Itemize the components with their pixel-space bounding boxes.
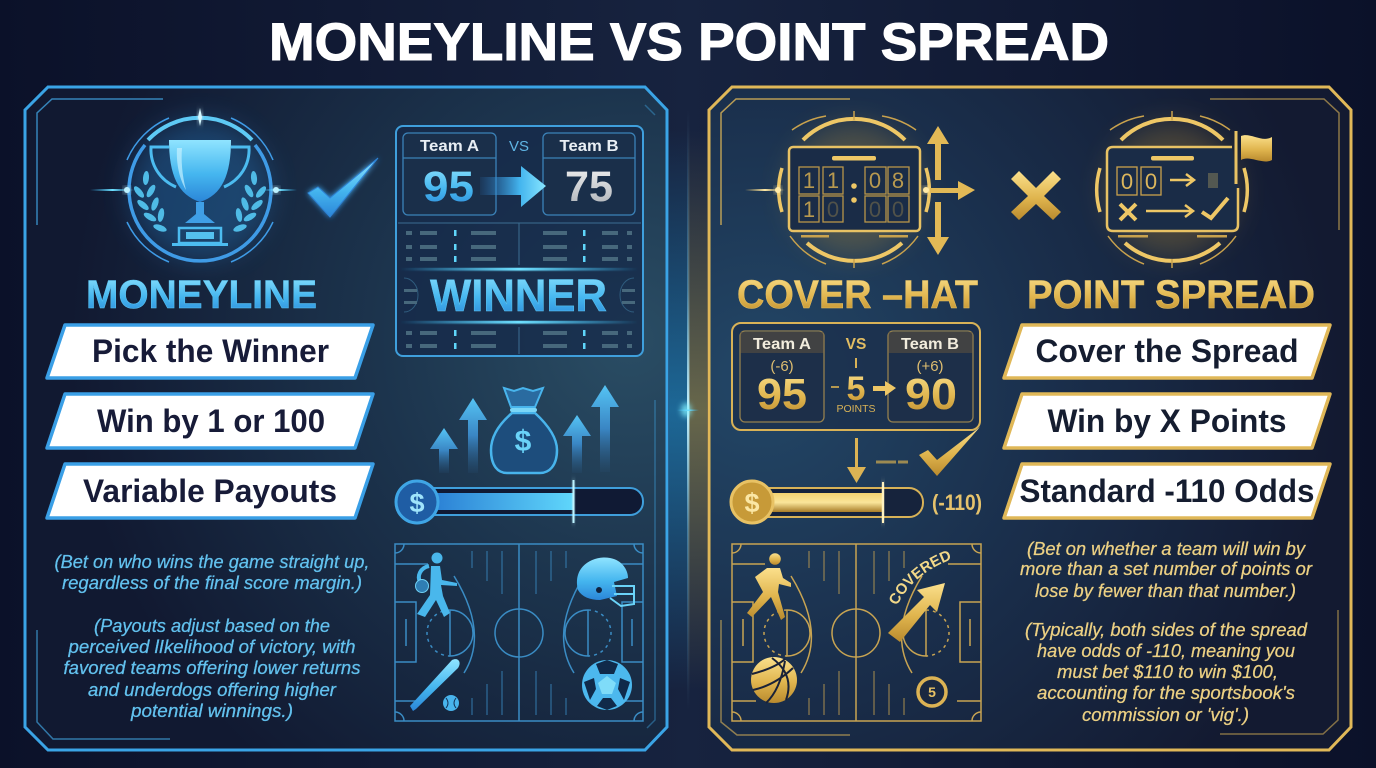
team A score: Team A bbox=[420, 138, 479, 155]
note: payouts: and underdogs offering higher bbox=[88, 680, 337, 700]
margin: 5 points: POINTS bbox=[836, 403, 876, 415]
pill: cover the spread: Cover the Spread bbox=[1036, 333, 1298, 369]
arrow: down to payout bbox=[847, 438, 866, 483]
progress bar: payout: $ bbox=[409, 488, 425, 518]
note: vig: (Typically, both sides of the spread bbox=[1025, 620, 1308, 640]
pill: win by 1 or 100: Win by 1 or 100 bbox=[97, 403, 325, 439]
icon: trophy emblem bbox=[90, 108, 297, 262]
pill: standard odds: Standard -110 Odds bbox=[1020, 473, 1314, 509]
progress bar: payout bbox=[396, 480, 643, 523]
note: spread bet: lose by fewer than that number.) bbox=[1035, 581, 1296, 601]
note: straight up bet: (Bet on who wins the game straight up, bbox=[54, 552, 370, 572]
team B score: Team B bbox=[560, 138, 618, 155]
icon: gold cross bbox=[1011, 171, 1061, 220]
note: vig: accounting for the sportsbook's bbox=[1037, 683, 1295, 703]
margin: 5 points: VS bbox=[846, 336, 866, 353]
team B spread score: 90 bbox=[905, 370, 957, 419]
heading: cover what: COVER –HAT bbox=[737, 273, 978, 317]
progress bar: spread payout: $ bbox=[744, 488, 760, 518]
icon: spread board emblem bbox=[1097, 111, 1272, 268]
note: payouts bbox=[64, 616, 360, 721]
note: straight up bet: regardless of the final score margin.) bbox=[62, 573, 362, 593]
pill: pick the winner bbox=[47, 325, 373, 378]
team B score bbox=[543, 133, 635, 215]
digits and outcome arrows bbox=[1117, 167, 1228, 220]
note: vig bbox=[1025, 620, 1308, 725]
note: payouts: perceived lIkelihood of victory, with bbox=[67, 637, 356, 657]
icon: scoreboard emblem: 1 bbox=[827, 168, 839, 193]
icon: scoreboard emblem: 0 bbox=[892, 197, 904, 222]
note: payouts: potential winnings.) bbox=[130, 701, 293, 721]
digits and outcome arrows: 0 bbox=[1121, 169, 1133, 194]
court with sports icons bbox=[395, 544, 643, 721]
icon: five coin bbox=[918, 678, 946, 706]
margin: 5 points bbox=[831, 336, 896, 415]
team A score bbox=[403, 133, 496, 215]
money bag: $ bbox=[515, 425, 532, 458]
icon: scoreboard emblem bbox=[745, 111, 929, 268]
money bag bbox=[491, 388, 557, 473]
icon: gold checkmark bbox=[919, 427, 980, 476]
team B spread score: Team B bbox=[901, 336, 959, 353]
icon: money bag with rising arrows bbox=[430, 385, 619, 473]
icon: football helmet bbox=[577, 557, 634, 606]
note: spread bet bbox=[1020, 539, 1313, 601]
dashed connector bbox=[876, 460, 908, 464]
note: spread bet: (Bet on whether a team will win by bbox=[1027, 539, 1306, 559]
team A spread score: 95 bbox=[757, 370, 807, 419]
team B spread score: (+6) bbox=[916, 358, 944, 375]
panel: moneyline bbox=[25, 87, 667, 750]
court lines bbox=[732, 544, 981, 721]
title: MONEYLINE VS POINT SPREAD bbox=[269, 13, 1109, 72]
pill: cover the spread bbox=[1004, 325, 1330, 378]
note: vig: commission or 'vig'.) bbox=[1082, 705, 1249, 725]
team A score: 95 bbox=[423, 163, 474, 211]
note: payouts: favored teams offering lower returns bbox=[64, 658, 360, 678]
pill: win by 1 or 100 bbox=[47, 394, 373, 448]
court with covered arrow bbox=[731, 543, 982, 722]
note: payouts: (Payouts adjust based on the bbox=[94, 616, 330, 636]
flip digits bbox=[799, 167, 909, 222]
team A spread score: (-6) bbox=[770, 358, 794, 375]
pill: variable payouts bbox=[47, 464, 373, 518]
icon: scoreboard emblem: 1 bbox=[803, 168, 815, 193]
panel frame: point spread bbox=[709, 87, 1351, 750]
label: covered: COVERED bbox=[890, 551, 950, 604]
icon: gold runner bbox=[747, 553, 791, 620]
note: vig: must bet $110 to win $100, bbox=[1057, 662, 1278, 682]
pill: pick the winner: Pick the Winner bbox=[92, 333, 329, 369]
scoreboard: winner bbox=[396, 126, 643, 356]
icon: scoreboard emblem: 1 bbox=[803, 197, 815, 222]
icon: spread direction arrows bbox=[927, 126, 975, 255]
note: straight up bet bbox=[54, 552, 370, 593]
heading: moneyline: MONEYLINE bbox=[86, 273, 317, 317]
arrow: covered bbox=[888, 583, 945, 642]
team A spread score bbox=[740, 331, 824, 422]
progress bar: spread payout bbox=[731, 481, 923, 523]
margin: 5 points: 5 bbox=[847, 370, 865, 408]
icon: blue checkmark bbox=[308, 158, 378, 217]
icon: soccer ball bbox=[582, 660, 632, 710]
digits and outcome arrows: 0 bbox=[1145, 169, 1157, 194]
winner banner text: WINNER bbox=[430, 270, 607, 321]
center divider glow bbox=[669, 110, 707, 710]
scoreboard: spread bbox=[732, 323, 980, 430]
stat rows bbox=[398, 223, 641, 354]
panel: point spread bbox=[708, 86, 1352, 752]
icon: runner with ball bbox=[416, 552, 457, 617]
pill: win by x points: Win by X Points bbox=[1048, 403, 1286, 439]
icon: baseball bat and ball bbox=[410, 659, 460, 711]
pill: variable payouts: Variable Payouts bbox=[83, 473, 337, 509]
note: vig: have odds of -110, meaning you bbox=[1037, 641, 1295, 661]
pill: standard odds bbox=[1004, 464, 1330, 518]
odds label: (-110) bbox=[932, 490, 982, 515]
panel frame: moneyline bbox=[25, 87, 667, 750]
icon: scoreboard emblem: 0 bbox=[869, 197, 881, 222]
text: point spread explanation bbox=[1020, 539, 1313, 725]
pill: win by x points bbox=[1004, 394, 1330, 448]
team B score: 75 bbox=[565, 163, 613, 211]
team A spread score: Team A bbox=[753, 336, 811, 353]
text: moneyline explanation bbox=[54, 552, 370, 721]
arrow: team A to team B bbox=[480, 166, 546, 207]
rising arrows bbox=[430, 385, 619, 473]
heading: point spread: POINT SPREAD bbox=[1027, 273, 1315, 317]
court lines bbox=[395, 544, 643, 721]
team B spread score bbox=[888, 331, 973, 422]
icon: basketball bbox=[751, 657, 797, 703]
icon: scoreboard emblem: 8 bbox=[892, 168, 904, 193]
icon: scoreboard emblem: 0 bbox=[869, 168, 881, 193]
note: spread bet: more than a set number of points or bbox=[1020, 559, 1313, 579]
icon: scoreboard emblem: 0 bbox=[827, 197, 839, 222]
versus label: VS bbox=[509, 138, 529, 155]
icon: five coin: 5 bbox=[928, 684, 936, 700]
flag bbox=[1234, 131, 1272, 184]
